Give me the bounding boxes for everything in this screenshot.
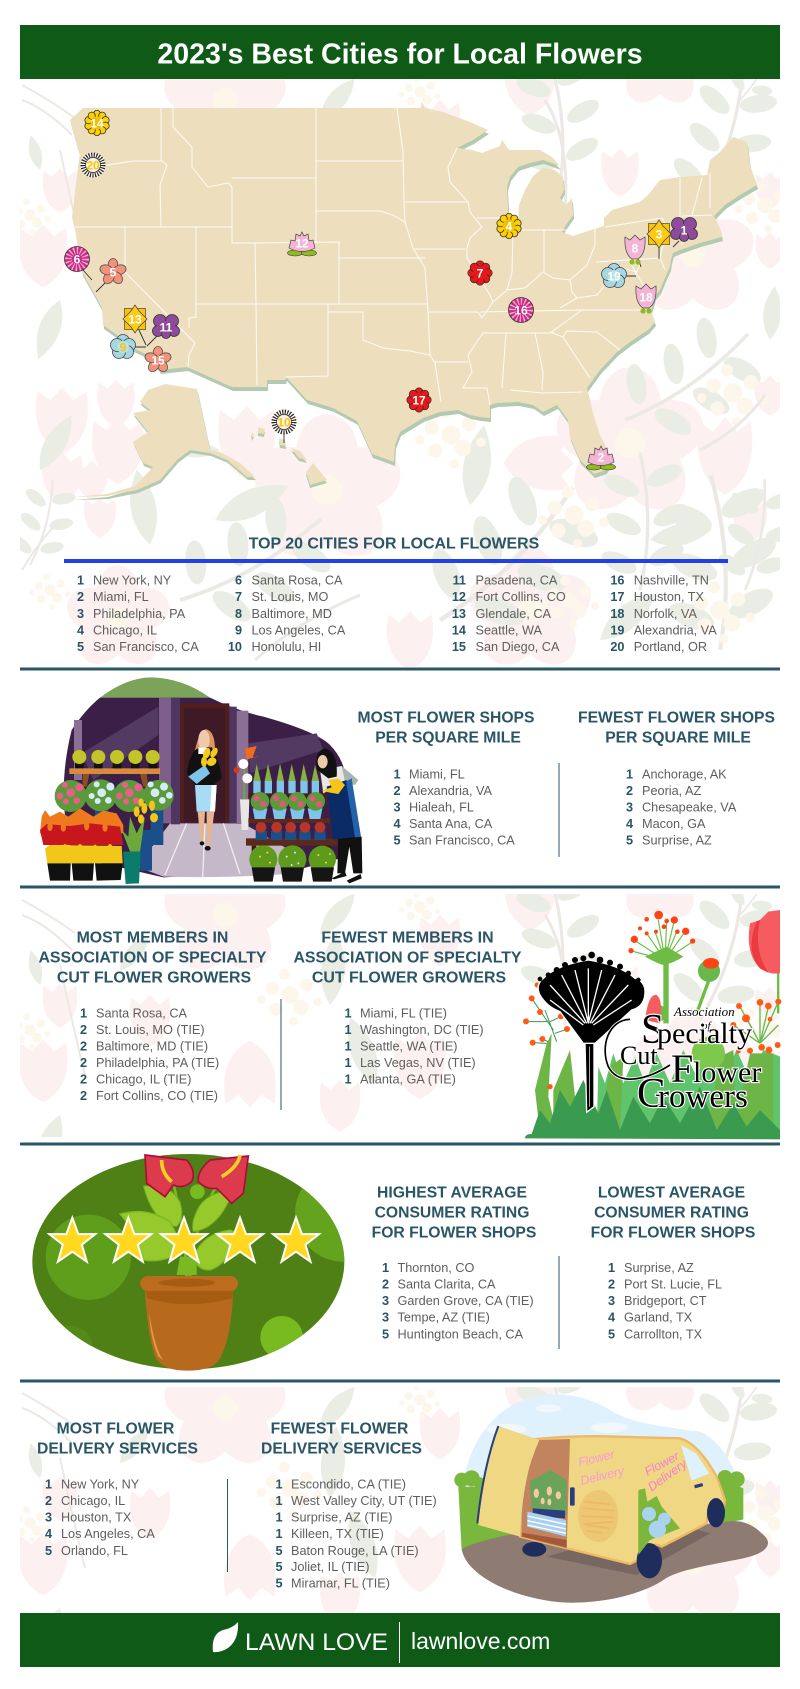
van body bbox=[520, 1436, 725, 1564]
list: most flower shops: Santa Ana, CA bbox=[409, 817, 493, 831]
list: top 20 column 2: Los Angeles, CA bbox=[252, 624, 346, 638]
list: top 20 column 2: Santa Rosa, CA bbox=[252, 574, 343, 588]
grass blades bbox=[597, 1043, 780, 1137]
bushes and grass bbox=[454, 1470, 745, 1550]
list: fewest delivery services: West Valley City, UT (TIE) bbox=[291, 1494, 437, 1508]
side lettering: Delivery bbox=[579, 1463, 626, 1488]
logo lettering: rowers bbox=[658, 1079, 748, 1115]
left orange sprig bbox=[523, 982, 570, 1089]
five stars bbox=[49, 1218, 319, 1262]
list: most members: 2 bbox=[80, 1056, 87, 1070]
logo wordmark: LAWN LOVE bbox=[245, 1629, 388, 1656]
list: most flower shops: 1 bbox=[393, 768, 400, 782]
floral background: delivery section bbox=[20, 1387, 780, 1613]
list: most flower shops: Miami, FL bbox=[409, 768, 465, 782]
marker 17 Houston: 17 bbox=[412, 394, 426, 408]
list: top 20 column 1: Chicago, IL bbox=[93, 624, 157, 638]
marker 3 Philadelphia: 3 bbox=[656, 228, 663, 242]
list: fewest members: Atlanta, GA (TIE) bbox=[360, 1072, 456, 1086]
list: fewest delivery services: 1 bbox=[275, 1510, 282, 1524]
marker 9 Los Angeles: 9 bbox=[120, 340, 127, 354]
logo lettering bbox=[620, 1004, 761, 1117]
list: fewest delivery services: Baton Rouge, LA (TIE) bbox=[291, 1544, 419, 1558]
list: fewest delivery services: 1 bbox=[275, 1527, 282, 1541]
list: most members: 1 bbox=[80, 1006, 87, 1020]
list: most delivery services: Orlando, FL bbox=[61, 1544, 128, 1558]
list: most delivery services: Los Angeles, CA bbox=[61, 1527, 155, 1541]
list: fewest delivery services: Joliet, IL (TIE) bbox=[291, 1560, 370, 1574]
map shadow bbox=[71, 106, 758, 500]
shop interior bbox=[64, 698, 347, 877]
list: most flower shops: 5 bbox=[393, 834, 400, 848]
list: most delivery services: Chicago, IL bbox=[61, 1494, 125, 1508]
list: fewest delivery services: Escondido, CA (TIE) bbox=[291, 1478, 406, 1492]
marker 5 San Francisco bbox=[99, 258, 127, 286]
logo lettering: Cut bbox=[620, 1041, 658, 1070]
heading: fewest flower shops: FEWEST FLOWER SHOPS bbox=[578, 710, 775, 726]
list: most members: Santa Rosa, CA bbox=[96, 1006, 188, 1020]
illustration: flower shop bbox=[40, 677, 362, 884]
list: top 20 column 3: 12 bbox=[452, 590, 466, 604]
list: lowest rating: 5 bbox=[608, 1328, 615, 1342]
list: fewest delivery services: 5 bbox=[275, 1544, 282, 1558]
terracotta pot bbox=[140, 1276, 238, 1371]
blue rule bbox=[64, 559, 728, 563]
list: lowest rating: 2 bbox=[608, 1278, 615, 1292]
list: fewest members: Washington, DC (TIE) bbox=[360, 1023, 484, 1037]
tulip display bbox=[40, 808, 123, 881]
illustration: flower delivery van bbox=[454, 1394, 768, 1603]
topiary pots bbox=[249, 845, 336, 882]
right shelves bbox=[246, 763, 337, 852]
list: lowest rating: Port St. Lucie, FL bbox=[624, 1278, 722, 1292]
list: top 20 column 2 bbox=[228, 574, 346, 654]
list: top 20 column 2: Honolulu, HI bbox=[252, 640, 321, 654]
pillars and door bbox=[159, 698, 171, 823]
logo lettering: S bbox=[641, 1007, 664, 1053]
list: highest rating: Huntington Beach, CA bbox=[398, 1328, 524, 1342]
list: top 20 column 3: 13 bbox=[452, 607, 466, 621]
list: top 20 column 3: 15 bbox=[452, 640, 466, 654]
marker 8 Baltimore: 8 bbox=[632, 242, 639, 256]
list: top 20 column 3: Seattle, WA bbox=[476, 624, 543, 638]
side wheels bbox=[637, 1498, 725, 1578]
marker 2 Miami bbox=[586, 446, 616, 470]
marker 14 Seattle bbox=[84, 110, 110, 136]
list: top 20 column 2: Baltimore, MD bbox=[252, 607, 332, 621]
list: most members: Baltimore, MD (TIE) bbox=[96, 1040, 208, 1054]
list: most delivery services: New York, NY bbox=[61, 1478, 140, 1492]
heading: fewest members: ASSOCIATION OF SPECIALTY bbox=[293, 950, 522, 966]
list: top 20 column 2: St. Louis, MO bbox=[252, 590, 328, 604]
list: top 20 column 1: 1 bbox=[77, 574, 84, 588]
green oval backdrop bbox=[32, 1154, 344, 1369]
list: top 20 column 3: Pasadena, CA bbox=[476, 574, 558, 588]
list: most delivery services: 5 bbox=[45, 1544, 52, 1558]
list: fewest flower shops: Surprise, AZ bbox=[642, 834, 712, 848]
marker 13 Glendale: 13 bbox=[128, 312, 142, 326]
list: top 20 column 4: 17 bbox=[610, 590, 624, 604]
red tulip bbox=[749, 910, 780, 1013]
list: top 20 column 1: New York, NY bbox=[93, 574, 172, 588]
heading: most members: CUT FLOWER GROWERS bbox=[57, 970, 251, 986]
heading: top 20 cities: TOP 20 CITIES FOR LOCAL FLOWERS bbox=[249, 536, 539, 552]
door handle bbox=[570, 1487, 575, 1506]
heading: lowest rating: FOR FLOWER SHOPS bbox=[591, 1224, 755, 1242]
list: top 20 column 4 bbox=[610, 574, 717, 654]
sky bbox=[460, 1394, 743, 1557]
list: fewest members: 1 bbox=[344, 1072, 352, 1086]
floor bbox=[137, 823, 307, 877]
list: highest rating: 5 bbox=[382, 1328, 389, 1342]
marker 1 New York: 1 bbox=[681, 224, 688, 238]
rear lettering: Delivery bbox=[645, 1456, 690, 1494]
title banner: 2023's Best Cities for Local Flowers bbox=[157, 38, 643, 70]
heading: lowest rating: LOWEST AVERAGE bbox=[598, 1184, 745, 1202]
list: fewest delivery services: 5 bbox=[275, 1560, 282, 1574]
list: highest rating: 1 bbox=[382, 1261, 389, 1275]
marker 15 San Diego: 15 bbox=[151, 354, 165, 368]
list: top 20 column 3: San Diego, CA bbox=[476, 640, 560, 654]
list: highest rating: Thornton, CO bbox=[398, 1261, 474, 1275]
heading: fewest flower shops: PER SQUARE MILE bbox=[605, 730, 751, 746]
marker 20 Portland: 20 bbox=[86, 158, 100, 172]
tall white flowers bbox=[234, 746, 260, 830]
list: most flower shops: Alexandria, VA bbox=[409, 784, 493, 798]
window bbox=[681, 1445, 709, 1481]
rear wheel bbox=[522, 1542, 546, 1557]
marker 8 Baltimore bbox=[625, 235, 645, 265]
list: highest rating: 3 bbox=[382, 1310, 389, 1324]
logo lettering: of bbox=[702, 1020, 712, 1032]
icon: lawn love leaf bbox=[213, 1622, 238, 1652]
flower decal on van side bbox=[638, 1488, 680, 1555]
heading: fewest members: CUT FLOWER GROWERS bbox=[312, 970, 506, 986]
marker 19 Alexandria: 19 bbox=[607, 270, 621, 284]
list: highest rating: Santa Clarita, CA bbox=[398, 1278, 496, 1292]
florist with watering can bbox=[316, 748, 362, 883]
list: top 20 column 3: 11 bbox=[453, 574, 466, 588]
heading: most flower shops: MOST FLOWER SHOPS bbox=[358, 710, 534, 726]
list: top 20 column 4: Portland, OR bbox=[634, 640, 707, 654]
vases behind bouquets bbox=[95, 805, 163, 871]
heading: fewest delivery services: FEWEST FLOWER bbox=[271, 1420, 408, 1438]
list: top 20 column 1 bbox=[77, 574, 199, 654]
marker 3 Philadelphia bbox=[647, 220, 671, 248]
floral background: map section bbox=[4, 16, 800, 676]
list: lowest rating: Garland, TX bbox=[624, 1310, 693, 1324]
list: top 20 column 4: Norfolk, VA bbox=[634, 607, 697, 621]
list: top 20 column 1: San Francisco, CA bbox=[93, 640, 199, 654]
heading: lowest rating: CONSUMER RATING bbox=[594, 1204, 749, 1222]
list: fewest flower shops: 1 bbox=[626, 768, 633, 782]
red anthurium blooms bbox=[145, 1155, 248, 1203]
list: most flower shops: 4 bbox=[393, 817, 400, 831]
list: most flower shops: 2 bbox=[393, 784, 400, 798]
list: top 20 column 4: 16 bbox=[610, 574, 624, 588]
list: highest rating: Tempe, AZ (TIE) bbox=[398, 1310, 490, 1324]
yellow tulips in teal vase bbox=[122, 798, 158, 884]
list: top 20 column 1: 5 bbox=[77, 640, 84, 654]
list: top 20 column 4: Alexandria, VA bbox=[634, 624, 717, 638]
marker 20 Portland bbox=[80, 152, 106, 178]
marker 6 Santa Rosa: 6 bbox=[74, 252, 81, 266]
rear door bbox=[478, 1426, 539, 1537]
list: fewest flower shops: 3 bbox=[626, 800, 633, 814]
marker 16 Nashville bbox=[508, 298, 534, 322]
list: top 20 column 3: Glendale, CA bbox=[476, 607, 551, 621]
marker 1 New York bbox=[670, 218, 698, 242]
logo lettering: pecialty bbox=[657, 1017, 752, 1050]
heading: most members: MOST MEMBERS IN bbox=[77, 930, 228, 946]
marker 12 Fort Collins: 12 bbox=[295, 236, 309, 250]
list: most members: St. Louis, MO (TIE) bbox=[96, 1023, 205, 1037]
list: fewest flower shops: 2 bbox=[626, 784, 633, 798]
heading: most flower shops: PER SQUARE MILE bbox=[375, 730, 521, 746]
top shelf with potted flowers bbox=[69, 750, 160, 787]
heading: fewest members: FEWEST MEMBERS IN bbox=[321, 930, 494, 946]
list: most flower shops bbox=[393, 768, 515, 848]
list: top 20 column 3: 14 bbox=[452, 624, 466, 638]
marker 13 Glendale bbox=[123, 305, 147, 333]
list: fewest members bbox=[344, 1006, 484, 1086]
list: most delivery services: 1 bbox=[45, 1478, 52, 1492]
list: top 20 column 1: 4 bbox=[77, 624, 84, 638]
list: most delivery services: 4 bbox=[45, 1527, 52, 1541]
list: fewest delivery services: 1 bbox=[275, 1494, 282, 1508]
list: fewest members: Las Vegas, NV (TIE) bbox=[360, 1056, 476, 1070]
list: top 20 column 4: Houston, TX bbox=[634, 590, 705, 604]
list: top 20 column 3: Fort Collins, CO bbox=[476, 590, 566, 604]
list: lowest rating: Carrollton, TX bbox=[624, 1328, 703, 1342]
list: fewest delivery services: 1 bbox=[275, 1478, 282, 1492]
list: top 20 column 2: 9 bbox=[235, 624, 242, 638]
grass base bbox=[525, 1080, 780, 1139]
list: top 20 column 1: 2 bbox=[77, 590, 84, 604]
road bbox=[462, 1521, 768, 1603]
state borders bbox=[75, 108, 712, 405]
marker 9 Los Angeles bbox=[110, 334, 136, 358]
logo lettering: G bbox=[637, 1071, 667, 1117]
rear lettering: Flower bbox=[642, 1449, 682, 1479]
crate of flowers bbox=[527, 1470, 567, 1537]
marker 6 Santa Rosa bbox=[64, 246, 90, 272]
heading: highest rating: FOR FLOWER SHOPS bbox=[372, 1224, 536, 1242]
heading: fewest delivery services: DELIVERY SERVICES bbox=[261, 1440, 422, 1458]
list: highest rating bbox=[382, 1261, 534, 1342]
logo lettering: Association bbox=[673, 1004, 735, 1019]
marker 14 Seattle: 14 bbox=[90, 116, 104, 130]
list: lowest rating: 1 bbox=[608, 1261, 615, 1275]
list: most members: 2 bbox=[80, 1040, 87, 1054]
illustration: association of specialty cut flower growers logo bbox=[523, 910, 781, 1139]
marker 11 Pasadena bbox=[152, 314, 180, 338]
list: top 20 column 4: 18 bbox=[610, 607, 624, 621]
woman with bouquet bbox=[187, 729, 222, 851]
list: top 20 column 4: 20 bbox=[610, 640, 624, 654]
logo lettering: F bbox=[671, 1046, 693, 1091]
side lettering: Flower bbox=[577, 1447, 617, 1470]
marker 17 Houston bbox=[407, 388, 431, 412]
side lettering bbox=[577, 1447, 626, 1488]
marker 12 Fort Collins bbox=[288, 232, 316, 256]
leader lines bbox=[83, 241, 679, 443]
marker 10 Honolulu bbox=[272, 410, 296, 434]
black fan flower bbox=[538, 952, 645, 1112]
heading: highest rating: HIGHEST AVERAGE bbox=[377, 1184, 527, 1202]
list: top 20 column 3 bbox=[452, 574, 566, 654]
list: lowest rating: 4 bbox=[608, 1310, 615, 1324]
list: top 20 column 2: 7 bbox=[235, 590, 242, 604]
website address: lawnlove.com bbox=[411, 1628, 550, 1654]
floral background: growers section bbox=[20, 894, 780, 1137]
marker 10 Honolulu: 10 bbox=[277, 416, 291, 430]
list: fewest delivery services bbox=[275, 1478, 437, 1590]
clouds bbox=[487, 1404, 628, 1435]
list: most delivery services: 2 bbox=[45, 1494, 52, 1508]
list: most flower shops: San Francisco, CA bbox=[409, 834, 515, 848]
list: highest rating: Garden Grove, CA (TIE) bbox=[398, 1294, 534, 1308]
list: fewest members: Seattle, WA (TIE) bbox=[360, 1040, 458, 1054]
heading: highest rating: CONSUMER RATING bbox=[375, 1204, 529, 1222]
bouquets bbox=[55, 779, 174, 812]
orange-tipped flower head bbox=[628, 911, 695, 1023]
map landmass bbox=[70, 102, 757, 497]
list: top 20 column 2: 6 bbox=[235, 574, 242, 588]
list: highest rating: 3 bbox=[382, 1294, 389, 1308]
list: top 20 column 4: Nashville, TN bbox=[634, 574, 709, 588]
list: most members: 2 bbox=[80, 1023, 87, 1037]
list: most flower shops: 3 bbox=[393, 800, 400, 814]
list: most members: Chicago, IL (TIE) bbox=[96, 1072, 191, 1086]
list: lowest rating: Surprise, AZ bbox=[624, 1261, 694, 1275]
list: most members: 2 bbox=[80, 1089, 87, 1103]
marker 7 St. Louis: 7 bbox=[477, 266, 484, 280]
marker 16 Nashville: 16 bbox=[514, 304, 528, 318]
list: fewest flower shops: Chesapeake, VA bbox=[642, 800, 737, 814]
list: most members bbox=[80, 1006, 219, 1103]
list: most flower shops: Hialeah, FL bbox=[409, 800, 474, 814]
list: top 20 column 1: Philadelphia, PA bbox=[93, 607, 186, 621]
list: fewest flower shops bbox=[626, 768, 737, 848]
list: top 20 column 2: 10 bbox=[228, 640, 242, 654]
list: most members: 2 bbox=[80, 1072, 87, 1086]
list: top 20 column 2: 8 bbox=[235, 607, 242, 621]
illustration: potted anthurium with five stars bbox=[32, 1154, 344, 1371]
list: lowest rating: Bridgeport, CT bbox=[624, 1294, 707, 1308]
heading: most members: ASSOCIATION OF SPECIALTY bbox=[38, 950, 267, 966]
list: top 20 column 1: 3 bbox=[77, 607, 84, 621]
list: top 20 column 4: 19 bbox=[610, 624, 624, 638]
footer banner bbox=[20, 1613, 780, 1667]
marker 11 Pasadena: 11 bbox=[160, 320, 173, 334]
swirl capital C bbox=[605, 1019, 670, 1079]
marker 7 St. Louis bbox=[468, 261, 492, 285]
poppy bud bbox=[697, 958, 720, 1013]
heading: most delivery services: MOST FLOWER bbox=[57, 1420, 174, 1438]
list: lowest rating: 3 bbox=[608, 1294, 615, 1308]
plant stems and leaves bbox=[120, 1180, 238, 1277]
marker 18 Norfolk bbox=[636, 284, 656, 314]
marker 18 Norfolk: 18 bbox=[639, 290, 653, 304]
list: fewest delivery services: Surprise, AZ (TIE) bbox=[291, 1510, 393, 1524]
logo lettering: lower bbox=[693, 1056, 761, 1089]
list: fewest delivery services: Killeen, TX (TIE) bbox=[291, 1527, 384, 1541]
list: top 20 column 1: Miami, FL bbox=[93, 590, 149, 604]
list: most members: Fort Collins, CO (TIE) bbox=[96, 1089, 218, 1103]
list: highest rating: 2 bbox=[382, 1278, 389, 1292]
list: most delivery services bbox=[45, 1478, 155, 1558]
list: fewest delivery services: Miramar, FL (TIE) bbox=[291, 1576, 390, 1590]
list: most members: Philadelphia, PA (TIE) bbox=[96, 1056, 219, 1070]
list: most delivery services: 3 bbox=[45, 1510, 52, 1524]
list: fewest flower shops: 4 bbox=[626, 817, 633, 831]
list: fewest members: 1 bbox=[344, 1023, 352, 1037]
marker 4 Chicago: 4 bbox=[506, 220, 513, 234]
list: fewest members: 1 bbox=[344, 1040, 352, 1054]
marker 19 Alexandria bbox=[602, 264, 626, 288]
cargo area bbox=[522, 1439, 570, 1548]
marker 5 San Francisco: 5 bbox=[110, 266, 117, 280]
side vent bbox=[578, 1490, 618, 1542]
list: fewest members: 1 bbox=[344, 1006, 352, 1020]
marker 15 San Diego bbox=[144, 346, 172, 374]
marker 2 Miami: 2 bbox=[598, 450, 605, 464]
heading: most delivery services: DELIVERY SERVICES bbox=[37, 1440, 198, 1458]
list: fewest members: Miami, FL (TIE) bbox=[360, 1006, 447, 1020]
list: fewest flower shops: Anchorage, AK bbox=[642, 768, 727, 782]
list: fewest flower shops: Peoria, AZ bbox=[642, 784, 701, 798]
right orange flower bbox=[730, 999, 781, 1054]
awning bbox=[100, 677, 210, 698]
map: United States with city markers bbox=[64, 102, 758, 500]
list: fewest members: 1 bbox=[344, 1056, 352, 1070]
list: fewest flower shops: 5 bbox=[626, 834, 633, 848]
list: fewest flower shops: Macon, GA bbox=[642, 817, 706, 831]
list: fewest delivery services: 5 bbox=[275, 1576, 282, 1590]
marker 4 Chicago bbox=[496, 213, 522, 239]
title banner bbox=[20, 25, 780, 79]
list: lowest rating bbox=[608, 1261, 722, 1342]
list: most delivery services: Houston, TX bbox=[61, 1510, 132, 1524]
